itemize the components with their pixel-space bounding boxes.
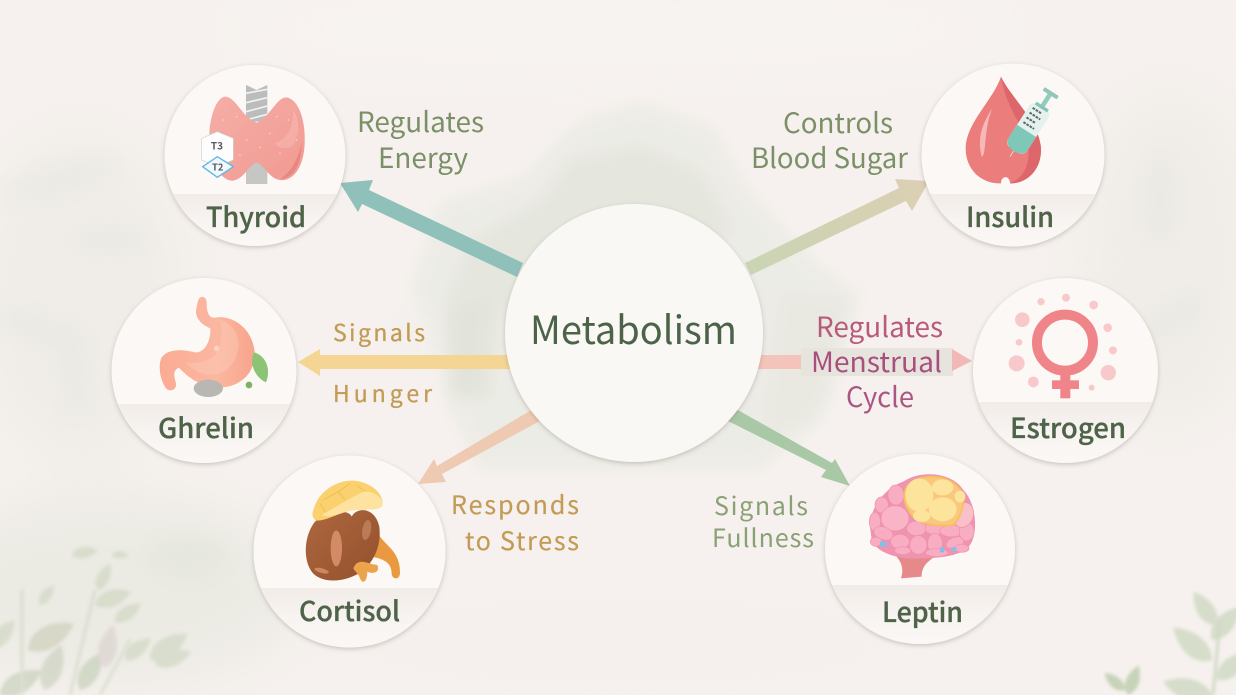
text: Regulates Menstrual Cycle: Regulates	[816, 306, 943, 346]
label: Thyroid: Thyroid	[206, 195, 306, 235]
label: Ghrelin: Ghrelin	[158, 406, 254, 446]
text: Signals Hunger: Signals	[333, 314, 425, 348]
arrow: leptin	[728, 409, 850, 486]
arrow: insulin	[745, 179, 929, 275]
icon: thyroid gland: T2	[212, 159, 224, 173]
center circle: Metabolism: Metabolism	[530, 300, 737, 356]
label: Leptin: Leptin	[882, 590, 963, 630]
text: Controls Blood Sugar	[751, 102, 908, 177]
center circle: Metabolism	[505, 204, 763, 462]
node: Estrogen	[965, 278, 1165, 466]
node: Thyroid	[160, 65, 350, 250]
text: Signals Fullness: Signals	[714, 487, 808, 523]
node: Ghrelin	[105, 278, 305, 466]
text: Signals Hunger: Hunger	[333, 375, 432, 409]
label: Insulin: Insulin	[966, 195, 1054, 235]
text: Signals Fullness	[712, 487, 814, 555]
icon: female symbol with dots	[1009, 294, 1117, 398]
icon: thyroid gland: T3	[211, 137, 223, 152]
node: Cortisol	[250, 456, 450, 652]
central foliage wash	[385, 103, 860, 470]
text: Regulates Energy: Energy	[378, 137, 468, 177]
arrow: estrogen	[758, 348, 972, 376]
text: Responds to Stress	[451, 486, 579, 558]
text: Regulates Menstrual Cycle: Cycle	[846, 376, 914, 416]
text: Regulates Menstrual Cycle: Menstrual	[811, 341, 942, 381]
arrow: ghrelin	[298, 349, 512, 376]
text: Regulates Menstrual Cycle	[811, 306, 943, 416]
arrow: thyroid	[340, 180, 523, 277]
label: Cortisol: Cortisol	[299, 589, 400, 629]
text: Signals Fullness: Fullness	[712, 519, 814, 555]
text: Responds to Stress: to Stress	[465, 522, 579, 558]
arrow: cortisol	[418, 409, 540, 484]
icon: blood drop and syringe	[966, 77, 1061, 183]
text: Responds to Stress: Responds	[451, 486, 579, 522]
icon: adrenal gland	[306, 481, 400, 582]
node: Leptin	[820, 454, 1020, 649]
text: Controls Blood Sugar: Controls	[783, 102, 893, 142]
icon: stomach	[160, 297, 268, 397]
node: Insulin	[920, 64, 1110, 250]
icon: brain	[869, 474, 977, 578]
text: Regulates Energy	[357, 101, 484, 177]
label: Estrogen: Estrogen	[1010, 406, 1126, 446]
text: Signals Hunger	[333, 314, 432, 409]
text: Controls Blood Sugar: Blood Sugar	[751, 137, 908, 177]
icon: thyroid gland	[202, 85, 305, 184]
text: Regulates Energy: Regulates	[357, 101, 484, 141]
